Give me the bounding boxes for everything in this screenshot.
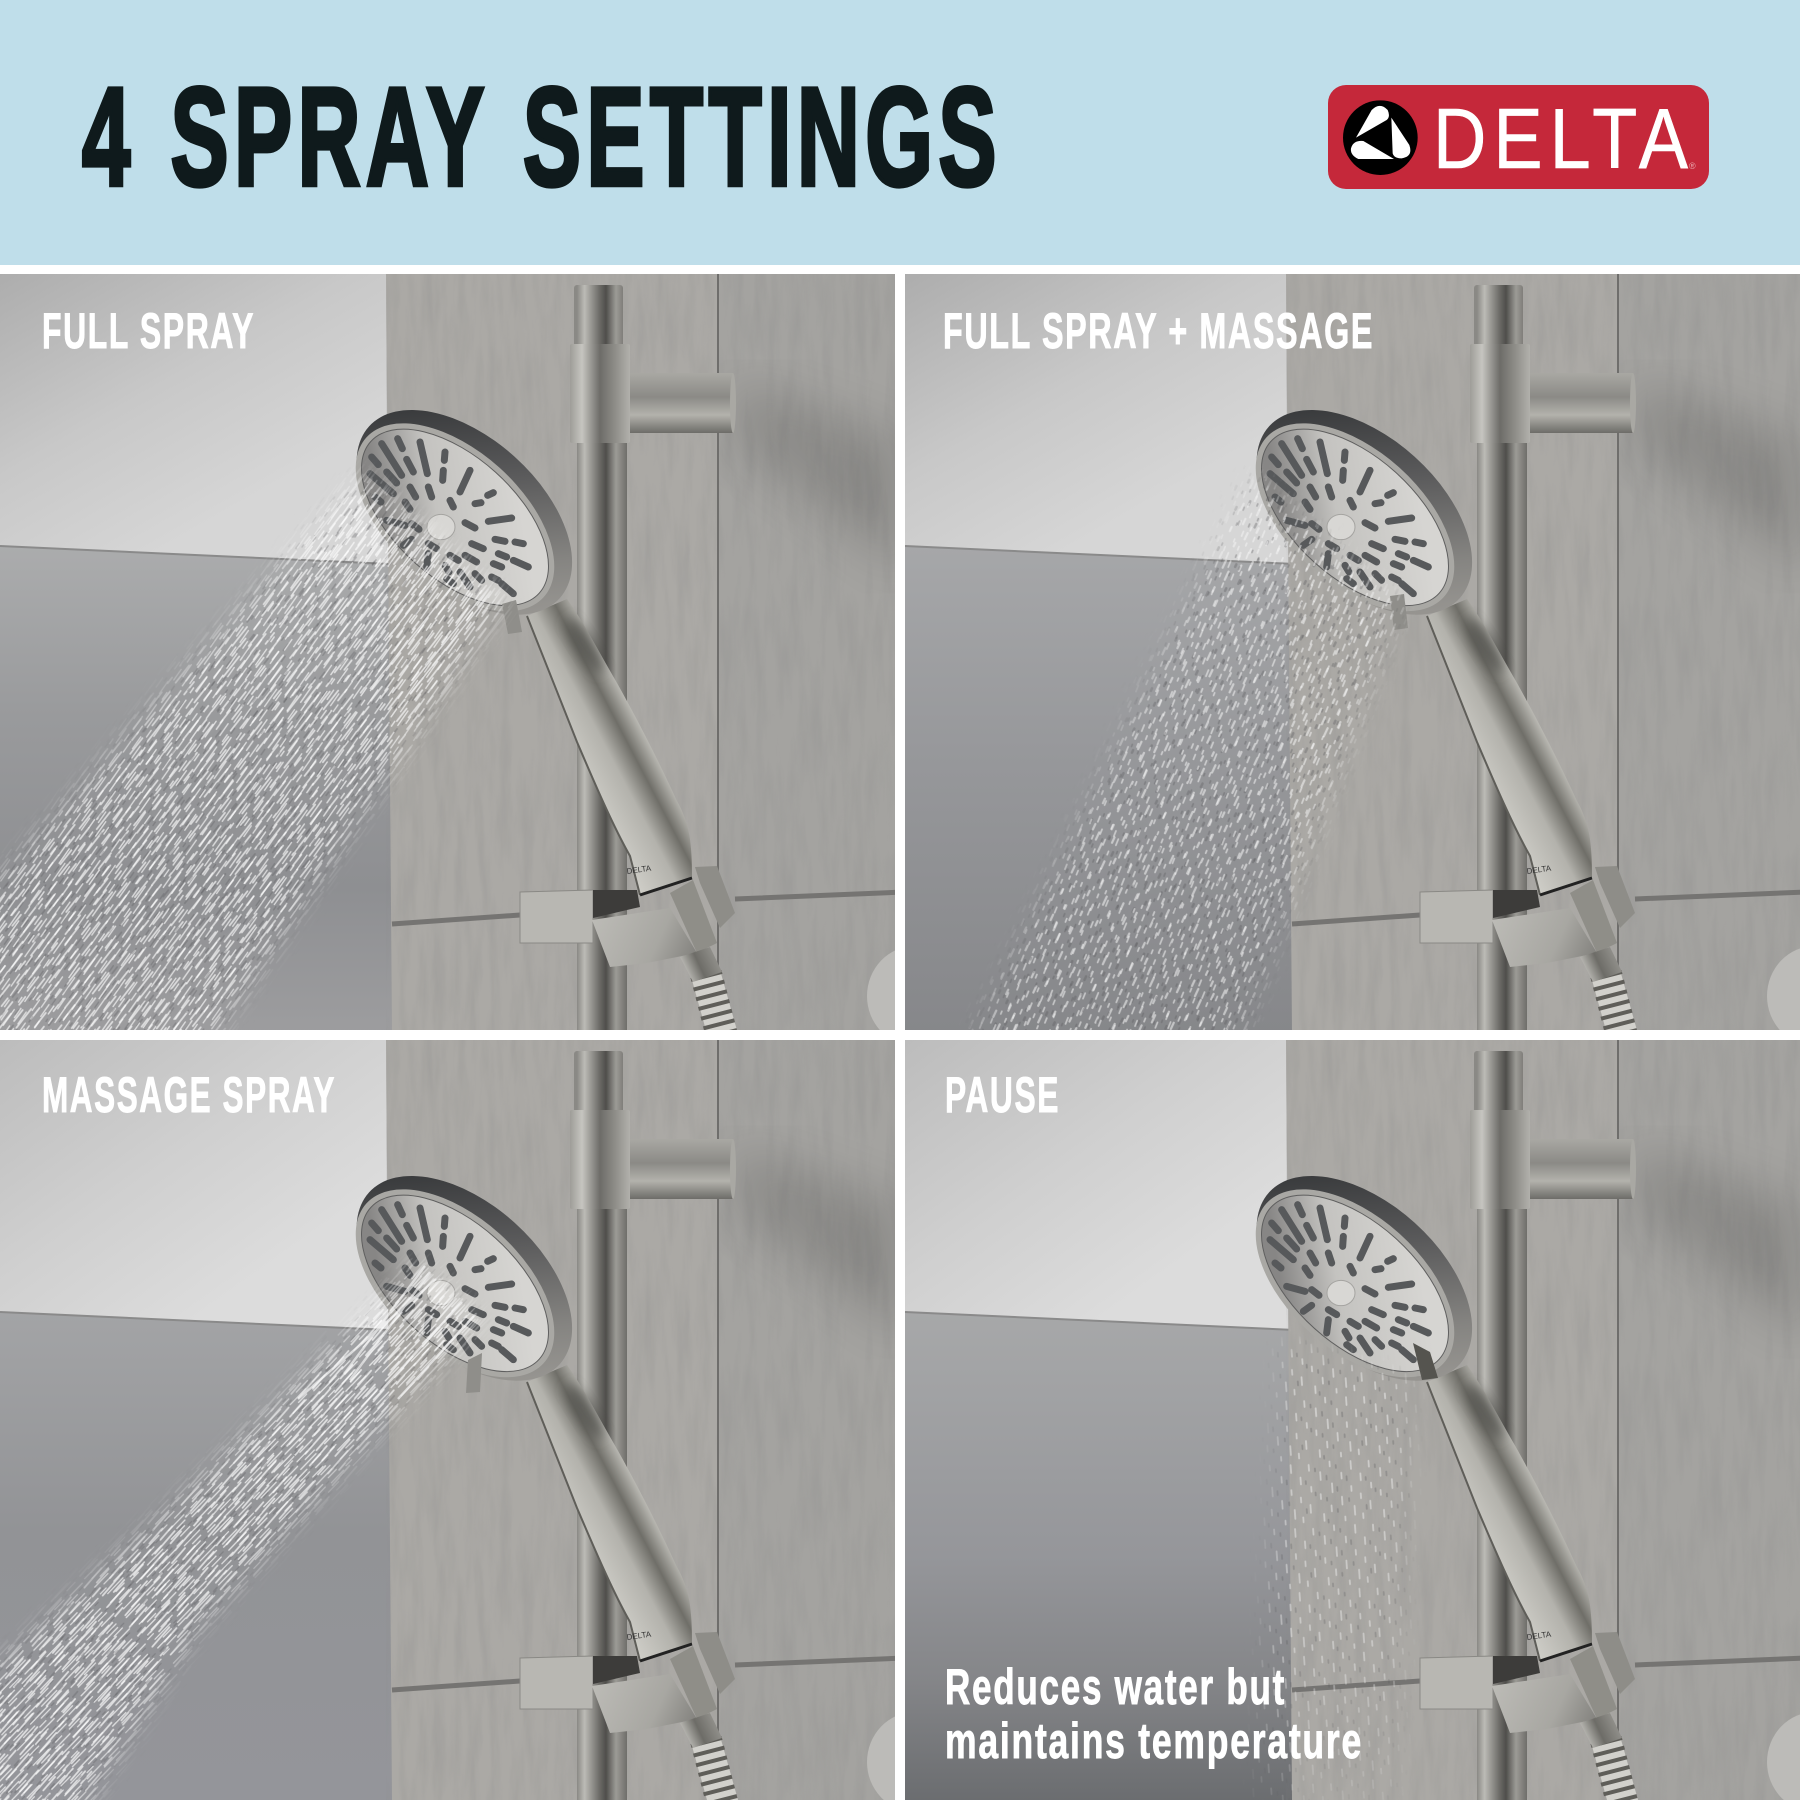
panel: full spray [0, 274, 963, 1046]
lever [502, 600, 522, 634]
water spray [968, 470, 1406, 1030]
title: 4 SPRAY SETTINGS [82, 58, 1002, 215]
label: full spray: FULL SPRAY [42, 303, 255, 359]
note: reduces water: maintains temperature [945, 1713, 1363, 1769]
lever [1390, 594, 1408, 630]
lever [466, 1353, 482, 1393]
logo wordmark: DELTA [1433, 92, 1695, 187]
lever [1413, 1343, 1438, 1380]
note: reduces water: Reduces water but [945, 1659, 1286, 1715]
logo emblem [1343, 100, 1418, 175]
water spray [0, 1240, 520, 1800]
water spray [0, 466, 513, 1030]
logo: Delta [1328, 85, 1709, 189]
note: reduces water [945, 1659, 1363, 1769]
label: massage spray: MASSAGE SPRAY [42, 1067, 336, 1123]
panel: full spray + massage [905, 274, 1800, 1046]
label: pause: PAUSE [945, 1067, 1060, 1123]
water drips [1256, 1338, 1416, 1800]
header band [0, 0, 1800, 265]
label: full spray + massage: FULL SPRAY + MASSAGE [943, 303, 1374, 359]
panel: massage spray [0, 1040, 963, 1800]
panel: pause [905, 1040, 1800, 1800]
registered mark: ® [1689, 161, 1696, 171]
